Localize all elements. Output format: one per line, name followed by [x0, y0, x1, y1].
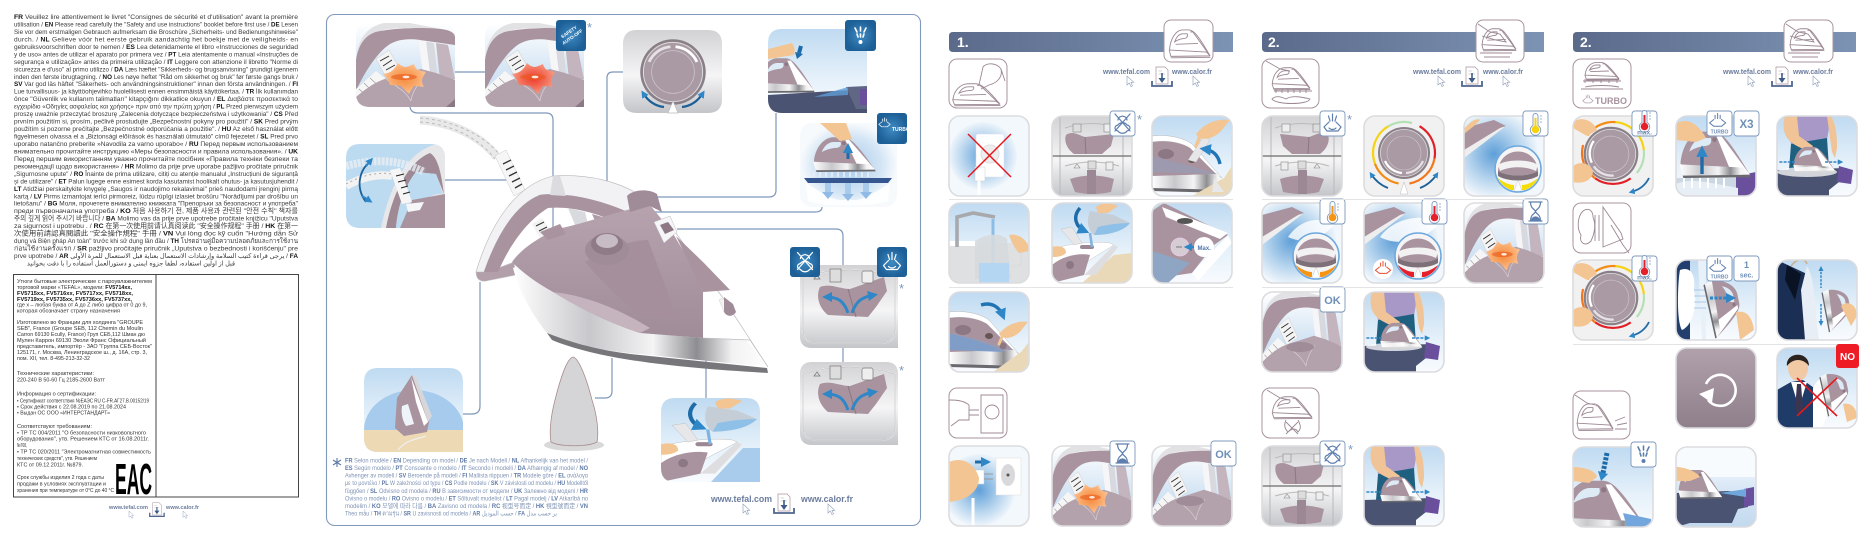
- badge: no steam: [790, 247, 820, 277]
- badge: turbo: [877, 113, 910, 144]
- panel: EAC certification box: • Выдан ОС ООО «ИНТЕРСТАНДАРТ»: [17, 410, 110, 416]
- badge: no steam: [1110, 111, 1135, 136]
- panel: EAC certification box: которая обозначает страну назначения: [17, 308, 120, 314]
- text block: safety booklet notice: lietošanu" / BG Моля, прочетете внимателно книжката "Препоръки за безопасност и употреба": [14, 200, 299, 208]
- badge: OK: OK: [1324, 295, 1341, 307]
- website links: left column: www.calor.fr: [165, 505, 200, 511]
- tile: rotate symbol: [1676, 348, 1756, 428]
- badge: hourglass: [1523, 199, 1548, 224]
- tile: tap and jug: [949, 203, 1029, 283]
- links section 3: [1722, 67, 1833, 86]
- text block: safety booklet notice: рекомендації щодо використання» / HR Molimo da prije prve uporabe pažljivo pročitate priručnik: [14, 162, 299, 170]
- top knob and nozzle button: [627, 190, 736, 316]
- text block: safety booklet notice: εγχειρίδιο «Οδηγίες ασφαλείας και χρήσης» πριν από την πρώτη χρήση / PL Przed pierwszym użyciem: [14, 103, 298, 111]
- panel: EAC certification box: продажи в условиях эксплуатации и: [17, 482, 106, 488]
- tile: man dry ironing: [1364, 446, 1444, 526]
- footnote: depending on model: Theo mẫu / TH ตามรุ่น / SR U zavisnosti od modela / AR حسب الموديل / FA بر حسب مدل: [345, 509, 557, 518]
- text block: safety booklet notice: Перед першим використанням уважно прочитайте посібник «Правила техніки безпеки та: [14, 155, 298, 163]
- tile: do not steam worn clothes: [1777, 348, 1857, 428]
- asterisks: *: [899, 281, 904, 296]
- icon: plug outline: [949, 388, 1007, 438]
- panel: EAC certification box: где x – любая буква от A до Z либо цифра от 0 до 9,: [17, 302, 147, 308]
- tile: unplug: [949, 116, 1029, 196]
- text block: safety booklet notice: Lue turvallisuus- ja käyttöohjevihko huolellisesti ennen ensimmäistä käyttökertaa. / TR İlk kullanımdan: [14, 87, 298, 96]
- icon: ironing outline header: [1476, 20, 1524, 62]
- badge: OK: [1211, 441, 1236, 466]
- text block: safety booklet notice: внимательно прочитайте инструкцию «Меры безопасности и правила использования». / UK: [14, 148, 298, 156]
- text block: safety booklet notice: ก่อนใช้งานครั้งแรก / SR pažljivo pročitajte priručnik „Uputstva o bezbednosti i korišćenju" pre: [14, 244, 298, 253]
- panel: main product overview frame: [326, 14, 920, 526]
- text block: safety booklet notice: 주의 깊게 읽어 주시기 바랍니다 / BA Molimo vas da prije prve upotrebe pročitate knjižicu "Uputstva: [14, 214, 298, 223]
- badge: safety auto-off: AUTO-OFF: [561, 28, 584, 46]
- text block: safety booklet notice: prvním použitím si, prosím, pečlivě prostudujte „Bezpečnostní pokyny pro použití" / SK Pred prvým: [14, 119, 298, 126]
- badge: safety auto-off: SAFETY: [560, 25, 578, 39]
- connector lines: [410, 72, 843, 414]
- badge: max temperature: [1632, 110, 1657, 136]
- text block: safety booklet notice: uporabo natančno preberite »Navodila za varno uporabo« / RU Перед первым использованием: [14, 141, 298, 148]
- tile: temperature dial: [623, 30, 722, 113]
- badge: steam: [1320, 111, 1345, 136]
- badge: spray: [845, 20, 876, 51]
- badge: safety auto-off: [556, 20, 586, 51]
- tile: max level: [1152, 203, 1232, 283]
- tile: turbo press: [1676, 116, 1756, 196]
- links section 1: [1102, 67, 1212, 86]
- panel: EAC certification box: FV5715xx, FV5716xx, FV5717xx, FV5718xx,: [17, 291, 133, 297]
- footnote: depending on model: [345, 457, 588, 518]
- text block: safety booklet notice: figyelmesen olvassa el a „Biztonsági előírások és használati útmutató" című fejezetet / SL Pred prvo: [14, 134, 298, 140]
- asterisks: [899, 281, 904, 378]
- icon: fill water outline: [949, 59, 1007, 108]
- icon: ironing outline header: [1784, 20, 1833, 62]
- illustration: main iron: [420, 118, 768, 373]
- panel: EAC certification box: Изготовлено во Франции для холдинга "GROUPE: [17, 320, 143, 326]
- tile: man turbo: [1777, 116, 1857, 196]
- panel: EAC certification box: 125171, г. Москва, Ленинградское ш., д. 16А, стр. 3,: [17, 350, 147, 356]
- badge: OK: [1320, 287, 1345, 312]
- links section 2: www.tefal.com: [1412, 69, 1461, 76]
- tile: fill water: [1052, 203, 1132, 283]
- tile: wait orange light: [1052, 446, 1132, 526]
- text block: safety booklet notice: „Sigurnosne upute" / RO Înainte de prima utilizare, citiți cu atenție manualul „Instrucțiuni de siguranță: [14, 169, 298, 178]
- hose and sleeve: [420, 118, 525, 196]
- badge: 1 sec: 1: [1744, 260, 1749, 270]
- section header 1: 1.: [957, 34, 969, 50]
- tile: iron standing on heel: [364, 368, 463, 452]
- soleplate stand: [544, 357, 604, 451]
- text block: safety booklet notice: durch. / NL Gelieve vóór het eerste gebruik aandachtig het boekje met de veiligheids- en: [14, 36, 298, 43]
- badge: hourglass: [1110, 441, 1135, 466]
- text block: safety booklet notice: 次使用前請認真閱讀此 "安全操作規程" 手冊 / VN Vui lòng đọc kỹ cuốn "Hướng dẫn Sử: [14, 229, 299, 238]
- text block: safety booklet notice: LT Atidžiai perskaitykite knygelę „Saugos ir naudojimo rekalavimai" prieš naudodami įrenginį pirmą: [14, 186, 298, 193]
- text block: safety booklet notice: segurança e utilização» antes da primeira utilização / IT Leggere con attenzione il libretto "Norme di: [14, 59, 299, 66]
- footnote: depending on model: modelim / KO 모델에 따라 다름 / BA Zavisno od modela / RC 视型号而定 / HK 視型號而定 / VN: [345, 501, 588, 510]
- panel: EAC certification box: №768,: [17, 443, 27, 449]
- tile: ready: [1262, 292, 1342, 372]
- text block: safety booklet notice: önce "Güvenlik ve kullanım talimatları" kitapçığını dikkatlice okuyun / EL Διαβάστε προσεκτικά το: [14, 95, 298, 103]
- text block: safety booklet notice: inden den første ibrugtagning. / NO Les nøye heftet "Råd om sikkerhet og bruk" før første gangs bruk /: [14, 73, 298, 81]
- badge: X3: [1734, 111, 1759, 136]
- panel: EAC certification box: Утюги бытовые электрические с пароувлажнителем: [17, 279, 152, 285]
- footnote: depending on model: με το μοντέλο / PL W zależności od typu / CS Podle modelu / SK V závislosti od modelu / HU Modelltől: [345, 479, 588, 487]
- tile: safety auto-off red: [485, 23, 585, 107]
- panel: EAC certification box: FV5719xx, FV5735xx, FV5736xx, FV5737xx,: [17, 297, 132, 303]
- links section 1: www.calor.fr: [1171, 69, 1212, 76]
- tile: temperature orange: [1261, 202, 1343, 284]
- icon: steam ironing outline: [1262, 59, 1319, 108]
- panel: EAC certification box: пом. XII, тел. 8-495-213-32-32: [17, 356, 90, 362]
- website links: left column: [108, 503, 200, 518]
- badge: thermometer yellow: [1523, 111, 1548, 136]
- tile: ready: [1152, 446, 1232, 526]
- panel: EAC certification box: Срок службы изделия 2 года с даты: [17, 475, 104, 481]
- tile: man steam ironing: [1364, 292, 1444, 372]
- section header 2: [1262, 32, 1544, 52]
- website links: main panel: www.calor.fr: [800, 494, 853, 504]
- icon: iron outline header: [1164, 20, 1213, 62]
- badge: no steam: [1320, 441, 1345, 466]
- footnote: depending on model: ES Según modelo / PT Consoante o modelo / IT Secondo i modelli / DA Afhængig af model / NO: [345, 465, 588, 472]
- text block: safety booklet notice: dụng và Biện pháp An toàn" trước khi sử dụng lần đầu / TH โปรดอ่านคู่มือความปลอดภัยและการใช้งาน: [14, 236, 298, 245]
- badge: NO: [1836, 344, 1859, 368]
- panel: EAC certification box: торговой марки «TEFAL», модели: FV5714xx,: [17, 284, 132, 291]
- text block: safety booklet notice: SV Var god läs häftet "Säkerhets- och användningsinstruktioner" innan den första användningen. / FI: [14, 81, 298, 88]
- badge: NO: NO: [1840, 352, 1855, 363]
- links section 2: [1412, 67, 1523, 86]
- asterisk: *: [1347, 112, 1352, 127]
- tile: open cap: [1152, 116, 1232, 196]
- tile: spray: [759, 29, 868, 113]
- tile: spray on shirt: [1676, 447, 1756, 527]
- links section 2: www.calor.fr: [1482, 69, 1523, 76]
- panel: EAC certification box: Соответствуют требованиям:: [17, 424, 92, 430]
- text block: safety booklet notice: kartą / LV Pirms izmantojat ierīci pirmoreiz, lūdzu rūpīgi izlasiet brošūru "Norādījumi par drošību un: [14, 193, 298, 200]
- tile: selector off: [1052, 116, 1132, 196]
- tile: temperature red: [1363, 202, 1445, 284]
- badge: turbo: [1707, 256, 1732, 281]
- tile: steam lock orange: [356, 23, 456, 107]
- text block: safety booklet notice: преди първоначална употреба / KO 처음 사용하기 전, 제품 사용과 관련된 "안전 수칙" 책자를: [14, 206, 298, 215]
- text block: safety booklet notice: proszę uważnie przeczytać broszurę „Zalecenia dotyczące bezpieczeństwa i użytkowania" / CS Před: [14, 111, 298, 118]
- text block: safety booklet notice: sicurezza e d'uso" al primo utilizzo / DA Læs hæftet "Sikkerheds- og brugsanvisning" grundigt igennem: [14, 66, 298, 73]
- tile: selector dry: [1262, 446, 1342, 526]
- panel: EAC certification box: КТС от 09.12.2011г. №879.: [17, 462, 83, 468]
- badge: 1 sec: sec.: [1740, 272, 1753, 280]
- panel: EAC certification box: Технические характеристики:: [17, 371, 94, 377]
- tile: vertical turbo steam: [1676, 260, 1756, 340]
- soleplate and silver band: [513, 265, 768, 373]
- icon: dry iron outline: [1262, 388, 1319, 438]
- text block: safety booklet notice: FR Veuillez lire attentivement le livret "Consignes de sécurité et d'utilisation" avant la première: [14, 14, 298, 21]
- badge: thermometer red: [1422, 199, 1447, 224]
- section header 3: 2.: [1580, 34, 1592, 50]
- panel: EAC certification box: [14, 274, 298, 504]
- badge: OK: OK: [1215, 449, 1232, 461]
- text block: safety booklet notice: [14, 14, 299, 268]
- badge: max temperature: max.: [1637, 130, 1652, 136]
- text block: safety booklet notice: și de utilizare" / ET Palun lugege enne esimest korda kasutamist hoolikalt ohutus- ja kasutusjuhendit /: [14, 178, 298, 185]
- panel: EAC certification box: Информация о сертификации:: [17, 392, 96, 398]
- panel: EAC certification box: • Сертификат соответствия №ЕАЭС RU C-FR.АГ27.В.00152/19: [17, 398, 149, 404]
- badge: max temperature: max.: [1637, 274, 1652, 282]
- section header 1: [949, 32, 1233, 52]
- icon: vertical steam outline: [1573, 203, 1631, 253]
- badge: steam: [877, 247, 907, 277]
- tile: filling water: [661, 398, 760, 482]
- panel: EAC certification box: хранения при температуре от 0°С до 40 °С: [17, 488, 114, 494]
- badge: turbo: [1707, 111, 1732, 136]
- tile: close cap: [949, 292, 1029, 372]
- badge: turbo: TURBO: [1711, 130, 1728, 136]
- text block: safety booklet notice: y de uso» antes de utilizar el aparato por primera vez / PT Leia atentamente o manual «Instruções de: [14, 51, 298, 58]
- website links: left column: www.tefal.com: [108, 505, 148, 511]
- panel: EAC certification box: • Срок действия с 22.08.2019 по 21.08.2024: [17, 404, 127, 410]
- text block: safety booklet notice: prve upotrebe / AR يرجى قراءة كتيب السلامة وإرشادات الاستعمال بعناية قبل الاستعمال للمرة الأولى / FA: [14, 251, 298, 260]
- panel: EAC certification box: Carron 69130 Ecully, France) Груп СЕБ,112 Шман дю: [17, 332, 146, 338]
- links section 1: www.tefal.com: [1102, 69, 1150, 76]
- tile: temperature yellow: [1463, 115, 1545, 197]
- badge: X3: X3: [1739, 119, 1754, 131]
- asterisk: *: [1348, 442, 1353, 457]
- panel: EAC certification box: 220-240 В 50-60 Гц 2185-2600 Ватт: [17, 378, 105, 384]
- badge: turbo: TURBO: [892, 127, 910, 133]
- footnote: depending on model: függően / SL Odvisno od modela / RU В зависимости от модели / UK Залежно від моделі / HR: [345, 487, 588, 495]
- links section 3: www.tefal.com: [1722, 69, 1771, 76]
- panel: EAC certification box: SEB", France (Groupe SEB, 112 Chemin du Moulin: [17, 326, 143, 332]
- tile: suit vertical steam: [1777, 260, 1857, 340]
- text block: safety booklet notice: gebruiksvoorschriften door te nemen / ES Lea detenidamente el libro «Instrucciones de seguridad: [14, 44, 298, 51]
- icon: spray outline: [1573, 391, 1630, 439]
- footnote: depending on model: FR Selon modèle / EN Depending on model / DE Je nach Modell / NL Afhankelijk van het model /: [345, 457, 588, 464]
- handle arch: [476, 176, 640, 281]
- panel: EAC certification box: • ТР ТС 004/2011 "О безопасности низковольтного: [17, 430, 146, 436]
- text block: safety booklet notice: Sie vor dem erstmaligen Gebrauch aufmerksam die Broschüre „Sicherheits- und Bedienungshinweise": [14, 29, 299, 36]
- tile: turbo steam: [798, 123, 897, 207]
- tile: max level: Max.: [1198, 246, 1211, 252]
- panel: EAC certification box: Мулен Каррон 69130 Эколи Франс Официальный: [17, 337, 146, 344]
- tile: selector no-steam and steam: [800, 265, 898, 348]
- tile: selector steam: [1262, 116, 1342, 196]
- asterisk: *: [587, 20, 592, 35]
- body shell: [512, 205, 730, 338]
- icon: turbo outline: [1573, 59, 1631, 108]
- tile: dial max: [1572, 112, 1654, 196]
- asterisks: *: [899, 363, 904, 378]
- text block: safety booklet notice: použitím si pozorne prečítajte „Bezpečnostné odporúčania a použitie". / HU Az első használat előtt: [14, 126, 298, 133]
- text block: safety booklet notice: za sigurnost i upotrebu . / RC 在第一次使用前请认真阅读此 "安全操作规程" 手册 / HK 在第一: [14, 221, 298, 230]
- badge: turbo: TURBO: [1711, 274, 1728, 280]
- section header 2: 2.: [1268, 34, 1280, 50]
- section header 3: [1573, 32, 1856, 52]
- panel: EAC certification box: EAC: [115, 455, 152, 504]
- website links: main panel: [710, 494, 853, 514]
- tile: selector alternate: [800, 362, 898, 445]
- tile: dial with temperature ring: [1364, 116, 1444, 196]
- panel: EAC certification box: представитель, импортёр - ЗАО "Группа СЕБ-Восток": [17, 344, 152, 350]
- panel: EAC certification box: оборудования", утв. Решением КТС от 16.08.2011г.: [17, 436, 149, 442]
- tile: cord swivel: [346, 144, 445, 228]
- text block: safety booklet notice: قبل از اولین استفاده، لطفا جزوه ایمنی و دستورالعمل استفاده را با دقت بخوانید: [27, 260, 235, 268]
- links section 3: www.calor.fr: [1792, 69, 1833, 76]
- badge: max temperature: [1632, 256, 1657, 282]
- badge: 1 sec: [1734, 256, 1759, 281]
- footnote: depending on model: Ovisno o modelu / RO Ovisno o modelu / ET Sõltuvalt mudelist / LT Pagal modelį / LV Atkarībā no: [345, 495, 588, 502]
- white nose: [655, 222, 768, 367]
- icon: turbo outline: TURBO: [1595, 96, 1627, 106]
- text block: safety booklet notice: utilisation / EN Please read carefully the "Safety and use instructions" booklet before first use / DE Lesen: [14, 22, 298, 28]
- tile: plug in: [943, 446, 1029, 526]
- footnote asterisk: [333, 458, 341, 467]
- asterisk: *: [1137, 112, 1142, 127]
- tile: spray press: [1572, 446, 1654, 528]
- tile: dial max vertical: [1572, 256, 1654, 340]
- panel: EAC certification box: • ТР ТС 020/2011 "Электромагнитная совместимость: [17, 450, 151, 456]
- badge: spray: [1631, 442, 1656, 467]
- panel: EAC certification box: технических средств", утв. Решением: [17, 456, 97, 462]
- tile: wait: [1464, 203, 1544, 283]
- badge: thermometer orange: [1320, 199, 1345, 224]
- website links: main panel: www.tefal.com: [710, 494, 772, 504]
- footnote: depending on model: Avhenger av modell / SV Beroende på modell / FI Mallista riippuen / TR Modele göre / EL ανάλογα: [345, 472, 588, 480]
